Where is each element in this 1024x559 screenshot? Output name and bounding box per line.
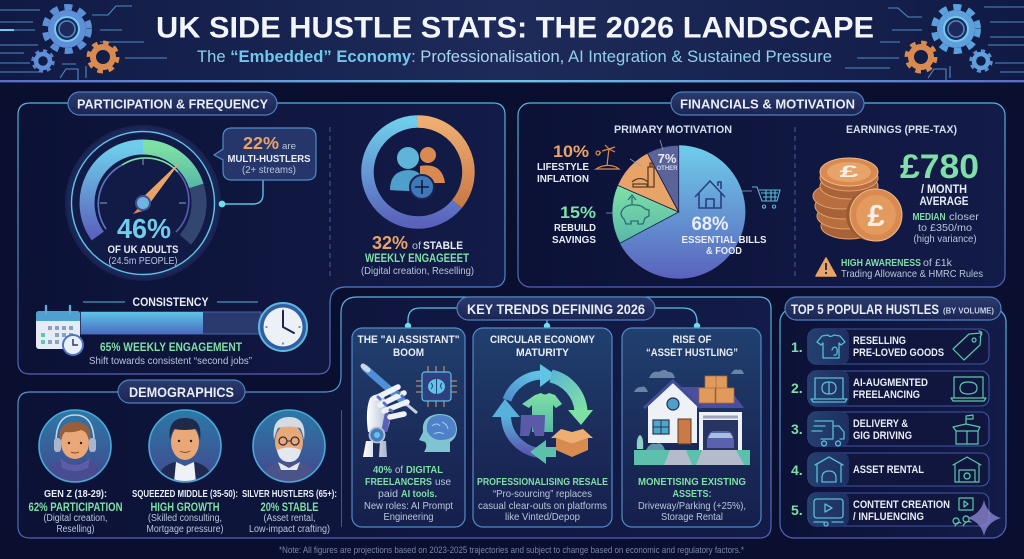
heading: demographics (118, 380, 245, 403)
card title: THE "AI ASSISTANT" (358, 334, 460, 346)
stat: 65% weekly engagement: 65% WEEKLY ENGAGEMENT (100, 340, 243, 354)
stat: 32% of stable: WEEKLY ENGAGEEET (365, 253, 469, 265)
note: high awareness of trading allowance: HIGH AWARENESS (841, 257, 921, 269)
text: gen z: GEN Z (18-29): (44, 489, 107, 500)
row 4: asset rental: ASSET RENTAL (853, 464, 924, 476)
label: 15% rebuild savings: REBUILD (554, 222, 596, 234)
text: squeezed middle: (Skilled consulting, (148, 513, 222, 524)
avatar: silver hustlers (253, 410, 325, 482)
label: of UK adults: OF UK ADULTS (108, 244, 178, 256)
note: high awareness of trading allowance (841, 257, 983, 280)
card text: Engineering (384, 511, 434, 523)
text: silver hustlers: SILVER HUSTLERS (65+): (242, 489, 337, 500)
label: 24.5m people: (24.5m PEOPLE) (108, 256, 178, 267)
icon: t-shirt (817, 335, 845, 358)
icon: stack of pound coins: £ (840, 162, 860, 181)
row 1: reselling pre-loved goods (791, 329, 989, 364)
row 1: reselling pre-loved goods: RESELLING (853, 335, 906, 347)
icon: shopping cart (752, 187, 780, 208)
row 2: AI-augmented freelancing: 2. (791, 380, 803, 396)
note: median closer to £350: MEDIAN (912, 211, 946, 223)
text: gen z: Reselling) (56, 524, 94, 535)
card text: paid (378, 488, 398, 500)
text: silver hustlers: Low-impact crafting) (249, 524, 330, 535)
card title (646, 334, 738, 359)
card text: Storage Rental (661, 511, 723, 523)
card text: 40% (373, 464, 393, 476)
card title: CIRCULAR ECONOMY (490, 334, 596, 346)
icon: laptop (951, 377, 986, 401)
orange gear (89, 43, 117, 71)
small gear (971, 51, 991, 71)
icon: open box (953, 415, 980, 444)
row 3: delivery and gig driving: 3. (791, 421, 803, 437)
value: 46%: 46% (117, 213, 171, 244)
callout: 22% multi-hustlers: MULTI-HUSTLERS (228, 153, 310, 165)
label: 15% rebuild savings: SAVINGS (552, 234, 596, 246)
card text: MONETISING EXISTING (638, 476, 746, 488)
card text: DIGITAL (406, 464, 444, 476)
panel: financials and motivation (518, 92, 1005, 287)
icon: head with brain (419, 414, 457, 452)
callout: 22% multi-hustlers: are (282, 141, 296, 152)
row 1: reselling pre-loved goods: PRE-LOVED GOODS (853, 347, 944, 359)
heading: primary motivation: PRIMARY MOTIVATION (614, 124, 732, 136)
needle (133, 160, 182, 214)
panel: top 5 popular hustles (780, 297, 1006, 538)
icon: laptop with brain (811, 378, 847, 402)
orange gear (907, 43, 935, 71)
heading: key trends defining 2026 (457, 297, 655, 320)
callout: 22% multi-hustlers: 22% (243, 133, 279, 153)
icon: clock (259, 303, 307, 351)
icon: house (695, 181, 725, 208)
row 3: delivery and gig driving (791, 412, 989, 446)
text: gen z: (Digital creation, (44, 513, 108, 524)
card: AI assistant boom (352, 328, 465, 527)
stat: £780 average: / MONTH (921, 182, 967, 196)
panel: participation and frequency (18, 92, 505, 374)
shorts (520, 415, 545, 436)
panel: demographics and key trends outline (18, 297, 771, 538)
callout: 22% multi-hustlers (214, 128, 316, 207)
pie chart: primary motivation (612, 145, 766, 279)
heading: key trends defining 2026: KEY TRENDS DEFINING 2026 (467, 301, 645, 317)
stat: 32% of stable: of (412, 241, 421, 252)
text: gen z (28, 489, 122, 535)
card title: “ASSET HUSTLING” (646, 347, 738, 359)
note: high awareness of trading allowance: Trading Allowance & HMRC Rules (841, 268, 983, 280)
card title: MATURITY (516, 347, 570, 359)
card title (490, 334, 596, 359)
stat: 32% of stable: 32% (372, 233, 408, 253)
text: gen z: 62% PARTICIPATION (28, 500, 122, 514)
icon: groceries (632, 163, 654, 187)
panel: key trends (352, 297, 761, 527)
title: UK SIDE HUSTLE STATS: THE 2026 LANDSCAPE (156, 12, 874, 44)
card title: RISE OF (672, 334, 712, 346)
icon: stack of pound coins (813, 158, 902, 241)
row 1: reselling pre-loved goods: 1. (791, 339, 803, 355)
card text: of (395, 465, 403, 476)
icon: storage unit (953, 457, 981, 482)
illustration: house with garage and boxes (634, 370, 750, 465)
row 5: content creation and influencing (791, 493, 989, 526)
label: 15% rebuild savings: 15% (560, 203, 596, 222)
heading: earnings pre-tax: EARNINGS (PRE-TAX) (846, 124, 957, 136)
consistency progress bar (36, 297, 307, 367)
heading: participation and frequency: PARTICIPATION & FREQUENCY (77, 96, 268, 112)
small gear (33, 51, 53, 71)
t-shirt (522, 393, 562, 432)
heading: participation and frequency (68, 92, 277, 115)
card text: New roles: AI Prompt (364, 500, 453, 512)
row 3: delivery and gig driving: DELIVERY & (853, 418, 908, 430)
text: silver hustlers: (Asset rental, (264, 513, 316, 524)
note: high awareness of trading allowance: of £1k (923, 257, 953, 269)
label: 10% lifestyle inflation: 10% (553, 142, 589, 161)
stat: 32% of stable: STABLE (423, 240, 463, 252)
icon: people with plus (390, 147, 445, 199)
donut chart: 32% stable (367, 121, 468, 222)
label: 15% rebuild savings (552, 203, 596, 246)
icon: delivery van (812, 421, 844, 446)
heading: financials and motivation (671, 92, 864, 115)
header banner (0, 0, 1024, 82)
icon: stack of pound coins: £ (867, 198, 885, 233)
note: median closer to £350: to £350/mo (918, 222, 972, 234)
heading: financials and motivation: FINANCIALS & MOTIVATION (680, 96, 855, 112)
row 5: content creation and influencing: / INFLUENCING (853, 511, 924, 523)
icon: audience and video (953, 498, 973, 526)
big gear (934, 7, 978, 51)
card text: casual clear-outs on platforms (478, 500, 607, 512)
card text (638, 476, 746, 523)
label: essential bills and food: ESSENTIAL BILLS (682, 234, 766, 246)
label: and food: & FOOD (706, 245, 742, 257)
row 2: AI-augmented freelancing (791, 371, 989, 406)
icon: warning triangle (816, 258, 836, 276)
text: squeezed middle: Mortgage pressure) (146, 524, 224, 535)
card text: like Vinted/Depop (505, 511, 580, 523)
icon: left gears and circuit lines (0, 6, 167, 81)
heading: top 5 popular hustles: TOP 5 POPULAR HUSTLES (791, 302, 939, 317)
card text (364, 464, 453, 523)
icon: sparkle watermark (967, 500, 1001, 536)
big gear (45, 7, 89, 51)
label: other: OTHER (656, 166, 678, 172)
icon: garage with car (815, 457, 843, 482)
card text: Driveway/Parking (+25%), (638, 500, 746, 512)
heading: consistency: CONSISTENCY (132, 297, 209, 309)
row 2: AI-augmented freelancing: FREELANCING (853, 389, 920, 401)
card text: ASSETS: (672, 488, 712, 500)
box (556, 438, 588, 457)
card text: “Pro-sourcing” replaces (493, 488, 592, 500)
icon: piggy bank (621, 195, 649, 224)
card text (477, 476, 608, 523)
icon: AI chip (416, 366, 457, 407)
icon: island (596, 145, 619, 169)
stat: 32% of stable (361, 233, 474, 277)
card: circular economy maturity (473, 328, 612, 527)
illustration: circular arrows with clothes and box (492, 364, 593, 464)
label: 10% lifestyle inflation: LIFESTYLE (537, 161, 589, 173)
heading: demographics: DEMOGRAPHICS (129, 384, 234, 400)
label: 10% lifestyle inflation (537, 142, 589, 185)
stat: £780 average (900, 148, 979, 208)
label: 68%: 68% (692, 214, 729, 235)
row 4: asset rental (791, 453, 989, 486)
note: median closer to £350: closer (949, 211, 980, 223)
card text: FREELANCERS (365, 476, 432, 488)
heading: top 5 popular hustles: (BY VOLUME) (943, 306, 994, 316)
label: 10% lifestyle inflation: INFLATION (537, 173, 589, 185)
text: silver hustlers: 20% STABLE (260, 500, 318, 514)
heading: top 5 popular hustles (785, 297, 1001, 320)
row 2: AI-augmented freelancing: AI-AUGMENTED (853, 377, 928, 389)
note: shift towards second jobs: Shift towards consistent “second jobs” (89, 355, 252, 367)
icon: price tag (953, 331, 982, 360)
text: squeezed middle: HIGH GROWTH (150, 500, 220, 514)
footnote: *Note: All figures are projections based on 2023-2025 trajectories and subject to change based on economic and regulatory factors.* (279, 545, 744, 556)
note: median closer to £350 (912, 211, 980, 245)
text: silver hustlers (242, 489, 337, 535)
icon: video player (814, 499, 843, 526)
row 4: asset rental: 4. (791, 462, 803, 478)
note: median closer to £350: (high variance) (914, 233, 976, 245)
card title (358, 334, 460, 359)
icon: right gears and circuit lines (845, 7, 1024, 81)
text: squeezed middle: SQUEEZED MIDDLE (35-50): (132, 489, 238, 500)
stat: £780 average: £780 (900, 148, 979, 186)
subtitle: The “Embedded” Economy: Professionalisation, AI Integration & Sustained Pressure (197, 48, 832, 66)
stat: 32% of stable: (Digital creation, Reselling) (361, 265, 474, 277)
stat: £780 average: AVERAGE (920, 194, 968, 208)
text: squeezed middle (132, 489, 238, 535)
gauge: 46% of UK adults (65, 125, 221, 281)
avatar: gen z (39, 410, 111, 482)
label: 7% other: 7% (658, 151, 677, 166)
card text: PROFESSIONALISING RESALE (477, 476, 608, 488)
card text: use (435, 476, 451, 488)
callout: 22% multi-hustlers: (2+ streams) (242, 165, 296, 176)
card text: AI tools. (401, 488, 437, 500)
row 5: content creation and influencing: 5. (791, 502, 803, 518)
icon: calendar (36, 306, 83, 355)
avatar: squeezed middle (149, 410, 221, 482)
row 3: delivery and gig driving: GIG DRIVING (853, 430, 912, 442)
card: rise of asset hustling (622, 328, 761, 527)
card title: BOOM (393, 347, 424, 359)
illustration: robot hand with pen (363, 366, 417, 457)
row 5: content creation and influencing: CONTENT CREATION (853, 499, 950, 511)
